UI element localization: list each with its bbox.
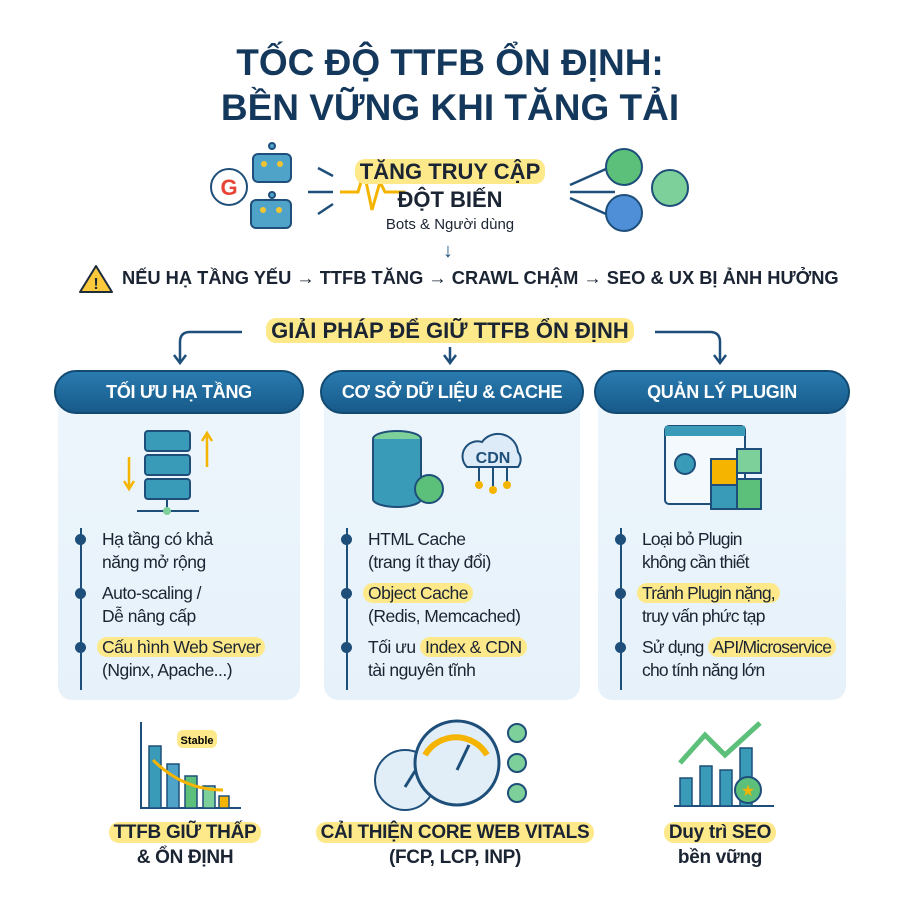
panel: database & cache: tài nguyên tĩnh xyxy=(368,660,475,680)
outcome: low TTFB: & ỔN ĐỊNH xyxy=(137,847,233,868)
icon: server xyxy=(123,430,213,515)
panel: infrastructure: TỐI ƯU HẠ TẦNG xyxy=(106,382,252,402)
panel: infrastructure: năng mở rộng xyxy=(102,552,206,572)
icon: warning: ! xyxy=(93,276,99,293)
heading: traffic xyxy=(355,159,545,212)
outcome: SEO: bền vững xyxy=(678,847,762,868)
panel: plugins: Sử dụng API/Microservice xyxy=(642,637,831,657)
panel: infrastructure: Dễ nâng cấp xyxy=(102,606,196,626)
panel: infrastructure: Cấu hình Web Server xyxy=(102,637,260,657)
icon: google: G xyxy=(220,175,238,200)
heading: traffic: ĐỘT BIẾN xyxy=(397,187,503,212)
panel: database & cache: CƠ SỞ DỮ LIỆU & CACHE xyxy=(342,382,562,402)
panel: database & cache: Tối ưu Index & CDN xyxy=(368,637,522,657)
icon: users xyxy=(606,149,688,231)
icon: pulse xyxy=(340,172,405,210)
panel: plugins xyxy=(598,372,846,700)
arrows to pulse xyxy=(308,168,333,214)
icon: declining bars: Stable xyxy=(180,735,214,747)
title: TỐC ĐỘ TTFB ỔN ĐỊNH: xyxy=(236,42,664,83)
outcome: core web vitals: CẢI THIỆN CORE WEB VITALS xyxy=(321,822,589,843)
icon: database and cdn xyxy=(372,430,522,508)
icon: plugin window xyxy=(664,425,762,510)
panel: database & cache xyxy=(324,372,580,700)
outcome: low TTFB: TTFB GIỮ THẤP xyxy=(114,822,256,843)
icon: growth chart: ★ xyxy=(741,783,755,800)
icon: bots xyxy=(251,143,291,228)
title: BỀN VỮNG KHI TĂNG TẢI xyxy=(221,87,679,128)
panel: database & cache: (trang ít thay đổi) xyxy=(368,552,491,572)
icon: warning xyxy=(79,265,113,293)
outcome: SEO: Duy trì SEO xyxy=(669,822,771,843)
panel: database & cache: (Redis, Memcached) xyxy=(368,606,520,626)
icon: declining bars xyxy=(140,722,241,809)
warning chain: NẾU HẠ TẦNG YẾU → TTFB TĂNG → CRAWL CHẬM → SEO & UX BỊ ẢNH HƯỞNG xyxy=(122,267,839,288)
icon: growth chart xyxy=(674,721,774,807)
panel: plugins: QUẢN LÝ PLUGIN xyxy=(647,382,797,402)
traffic spike section xyxy=(210,142,689,233)
panel: plugins: cho tính năng lớn xyxy=(642,660,764,680)
traffic spike section: Bots & Người dùng xyxy=(386,216,514,233)
icon: google xyxy=(211,169,247,205)
outcome: core web vitals: (FCP, LCP, INP) xyxy=(389,847,521,868)
icon: gauges xyxy=(374,720,527,811)
outcome: SEO xyxy=(664,721,776,868)
solution heading: GIẢI PHÁP ĐỂ GIỮ TTFB ỔN ĐỊNH xyxy=(271,318,629,343)
panel: infrastructure: Auto-scaling / xyxy=(102,583,201,603)
panel: infrastructure xyxy=(58,372,300,700)
panel: plugins: truy vấn phức tạp xyxy=(642,606,765,626)
branch arrows xyxy=(173,330,727,365)
panel: database & cache: Object Cache xyxy=(368,583,468,603)
panel: plugins: Loại bỏ Plugin xyxy=(642,529,742,549)
title xyxy=(221,42,679,128)
panel: infrastructure: Hạ tầng có khả xyxy=(102,529,213,549)
icon: database and cdn: CDN xyxy=(476,450,510,467)
outcome: core web vitals xyxy=(316,720,594,868)
panel: infrastructure: (Nginx, Apache...) xyxy=(102,660,232,680)
heading: traffic: TĂNG TRUY CẬP xyxy=(360,159,540,184)
arrow down: ↓ xyxy=(443,240,453,262)
panel: plugins: Tránh Plugin nặng, xyxy=(642,583,775,603)
outcome: low TTFB xyxy=(109,722,261,868)
panel: database & cache: HTML Cache xyxy=(368,529,465,549)
panel: plugins: không cần thiết xyxy=(642,552,749,572)
arrows to users xyxy=(570,165,615,218)
